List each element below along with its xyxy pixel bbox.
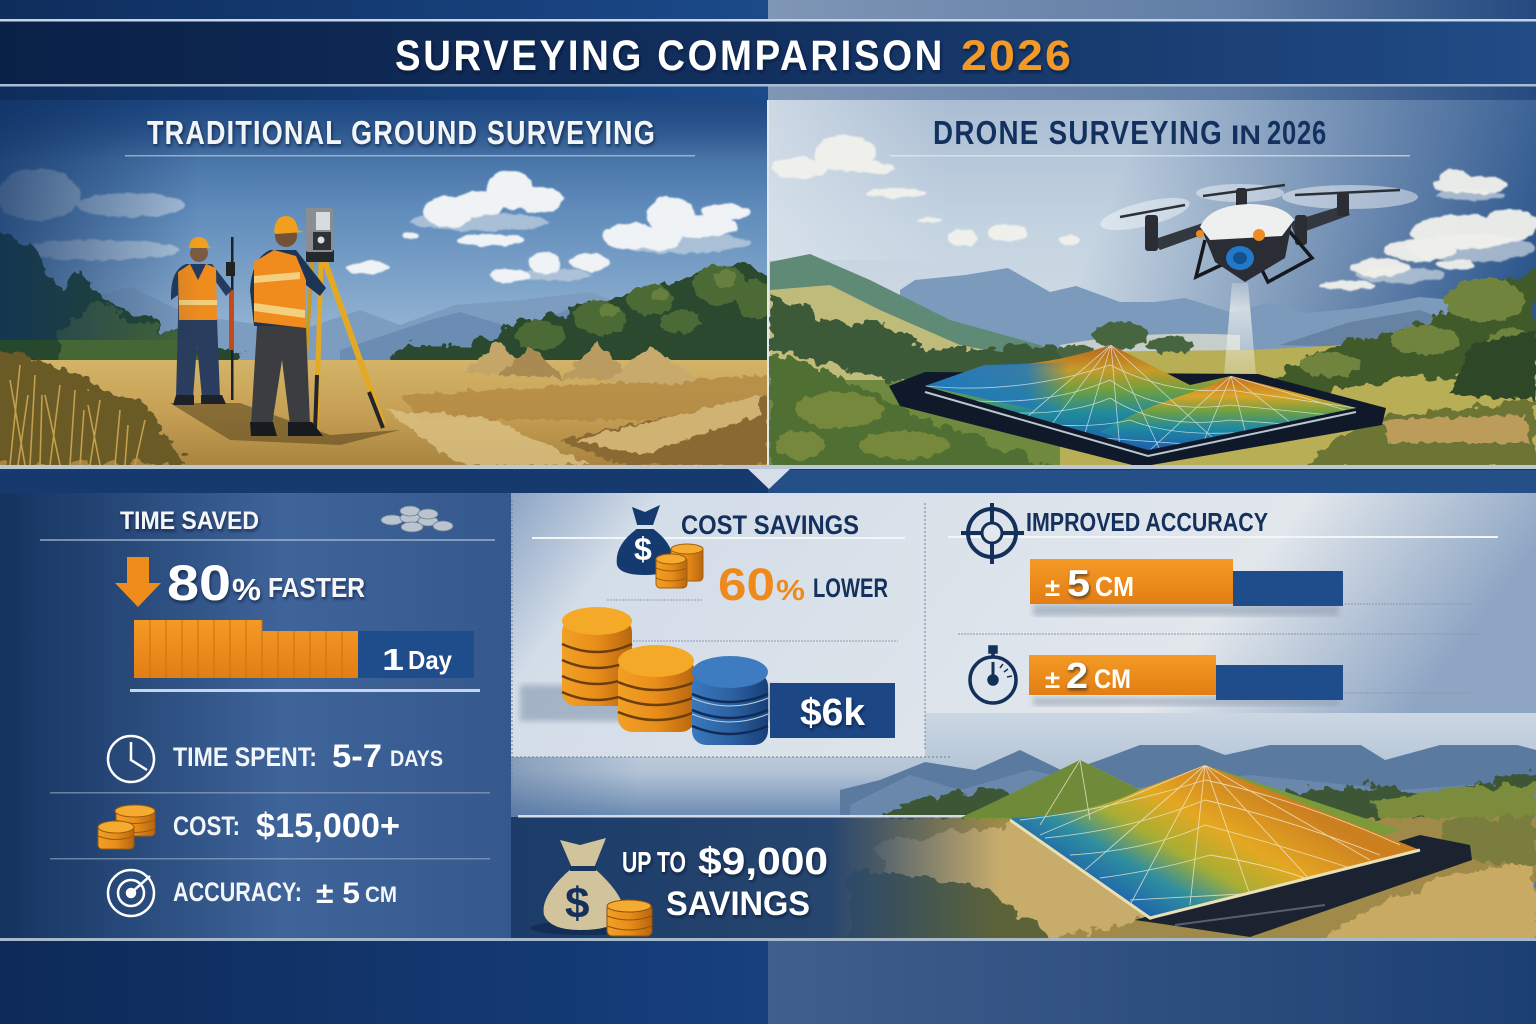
- shadow bar: [520, 685, 780, 721]
- stat row: cost: $15,000+: [256, 807, 400, 845]
- panel: drone surveying scene: [768, 100, 1536, 470]
- tablet and map: [960, 760, 1472, 937]
- accuracy bar 5 cm: 5: [1067, 563, 1090, 604]
- panel: improved accuracy: [948, 503, 1498, 706]
- 80% faster: %: [232, 572, 261, 607]
- 60% lower: %: [776, 575, 805, 607]
- time saved heading: TIME SAVED: [120, 507, 259, 535]
- time bar chart: [134, 620, 474, 678]
- savings text: [623, 846, 829, 919]
- accuracy bar 2 cm: [1029, 655, 1343, 706]
- icon: money bag: $: [634, 531, 652, 567]
- heading: drone surveying in 2026: [890, 114, 1410, 156]
- icon: crosshair: [961, 503, 1024, 564]
- drone: [1097, 184, 1418, 282]
- stat row: time spent: DAYS: [390, 746, 443, 771]
- panel: cost and accuracy background: [511, 493, 1536, 938]
- tablet with terrain map: [889, 345, 1386, 467]
- heading: traditional ground surveying: TRADITIONAL GROUND SURVEYING: [147, 114, 656, 151]
- stat row: cost: [98, 805, 400, 849]
- icon: clock: [108, 736, 154, 782]
- orange stack tall: [562, 607, 632, 706]
- icon: silver coins: [381, 506, 453, 532]
- accuracy bar 2 cm: CM: [1094, 664, 1131, 694]
- stat row: accuracy: [108, 870, 397, 916]
- panel: traditional ground surveying scene: [0, 100, 775, 465]
- coin stacks chart: [562, 607, 768, 745]
- panel divider: [767, 100, 769, 465]
- grass: [0, 345, 190, 465]
- accuracy bar 2 cm: 2: [1066, 655, 1088, 696]
- accuracy bar 2 cm: ±: [1045, 666, 1060, 694]
- icon: money bag: [617, 505, 673, 575]
- panel: time saved column: [0, 493, 511, 938]
- tripod: [306, 250, 383, 432]
- time bar chart: 1: [382, 642, 404, 677]
- savings text: UP TO: [622, 847, 686, 879]
- savings coin stack: [607, 900, 652, 936]
- stat row: accuracy: CM: [365, 882, 397, 907]
- heading: drone surveying in 2026: 2026: [1267, 114, 1327, 151]
- icon: stopwatch: [970, 647, 1016, 703]
- blue cost label: $6k: [800, 692, 866, 734]
- 80% faster: [167, 555, 365, 611]
- accuracy bar 5 cm: CM: [1095, 571, 1134, 602]
- title text: SURVEYING COMPARISON: [395, 32, 945, 80]
- field: [511, 818, 1536, 943]
- 60% lower: 60: [718, 559, 775, 610]
- cost savings heading: COST SAVINGS: [681, 510, 859, 540]
- clouds: [772, 135, 1536, 290]
- orange stack medium: [618, 645, 695, 732]
- stat row: cost: COST:: [173, 811, 240, 841]
- savings money bag: [530, 838, 621, 935]
- savings money bag: $: [565, 879, 589, 928]
- mountains: [900, 268, 1449, 351]
- mountains: [106, 290, 611, 360]
- blue cost label: [770, 683, 895, 738]
- accuracy bar 5 cm: [1030, 559, 1343, 616]
- tree lines: [0, 235, 240, 375]
- hills and trees: [769, 374, 1060, 465]
- savings text: SAVINGS: [666, 885, 810, 923]
- surveyor at total station: [250, 216, 326, 436]
- icon: small coin stacks: [656, 544, 703, 588]
- accuracy bar 5 cm: ±: [1045, 574, 1060, 602]
- stat row: time spent: 5-7: [332, 738, 382, 774]
- panel: cost savings: [520, 505, 905, 745]
- distant mountains: [840, 745, 1536, 817]
- dark savings band: [511, 817, 1001, 938]
- icon: target: [108, 870, 154, 916]
- surveyor with pole: [171, 237, 235, 405]
- heading: drone surveying in 2026: IN: [1231, 120, 1261, 150]
- tree line: [881, 767, 1536, 821]
- icon: gold coins: [98, 805, 155, 849]
- time bar chart: Day: [408, 645, 452, 675]
- icon: down arrow: [115, 557, 161, 607]
- title banner: [0, 19, 1536, 86]
- 80% faster: FASTER: [268, 572, 365, 603]
- ground: [0, 360, 768, 465]
- clouds: [0, 169, 750, 283]
- title year: 2026: [961, 32, 1073, 80]
- blue stack: [692, 656, 768, 745]
- accuracy heading: IMPROVED ACCURACY: [1026, 507, 1268, 537]
- heading: drone surveying in 2026: DRONE SURVEYING: [933, 114, 1223, 151]
- soil mounds: [465, 342, 700, 384]
- stat row: accuracy: ACCURACY:: [173, 877, 302, 907]
- scan beam: [1224, 283, 1256, 375]
- stat row: time spent: TIME SPENT:: [173, 742, 317, 772]
- panel: savings summary scene: [511, 732, 1536, 945]
- savings text: $9,000: [698, 841, 828, 883]
- stat row: time spent: [108, 736, 443, 782]
- figure shadows: [170, 403, 400, 445]
- 80% faster: 80: [167, 555, 231, 611]
- total station: [306, 208, 333, 252]
- 60% lower: LOWER: [813, 573, 888, 603]
- 60% lower: [718, 559, 888, 610]
- section band with notch: [0, 465, 1536, 493]
- stat row: accuracy: ± 5: [316, 877, 360, 910]
